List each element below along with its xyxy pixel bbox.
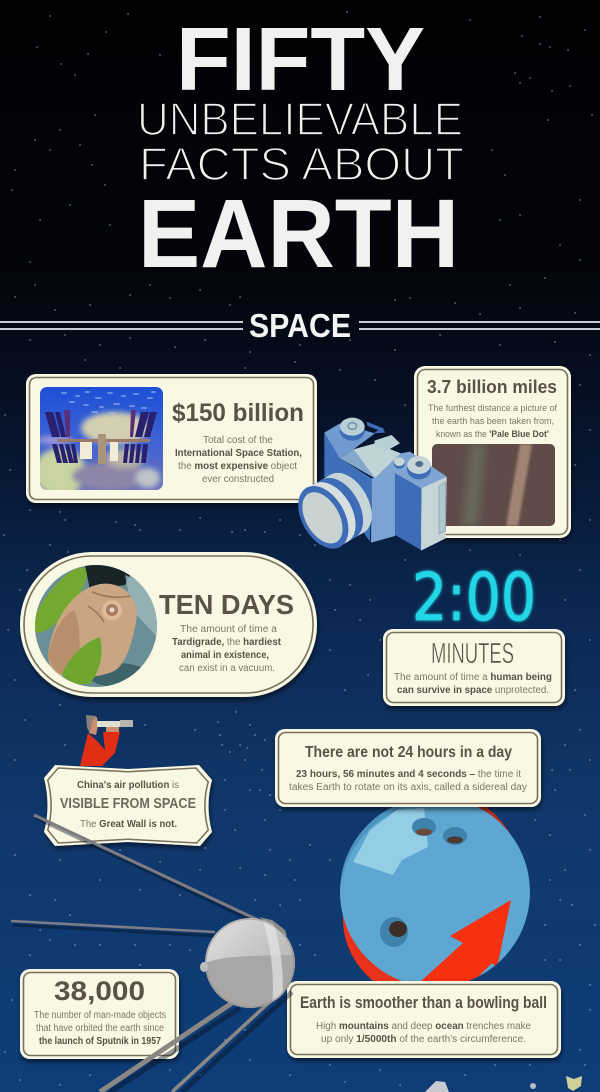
icon: bowling ball with red arrow: [340, 795, 530, 987]
text block: that have orbited the earth since: [36, 1023, 164, 1034]
heading: MINUTES: [431, 638, 514, 670]
title line: FIFTY: FIFTY: [176, 10, 425, 110]
image: International Space Station: [34, 387, 163, 496]
text block: The Great Wall is not.: [80, 819, 177, 830]
text block: [175, 435, 302, 485]
panel: ten days: [20, 552, 317, 697]
heading: TEN DAYS: [159, 589, 294, 620]
title line: EARTH: EARTH: [138, 179, 459, 288]
text block: [289, 769, 527, 793]
text block: High mountains and deep ocean trenches make: [316, 1021, 531, 1032]
title line: UNBELIEVABLE: UNBELIEVABLE: [137, 93, 463, 145]
heading: Earth is smoother than a bowling ball: [300, 994, 547, 1012]
text block: International Space Station,: [175, 448, 302, 459]
text block: ever constructed: [202, 474, 274, 485]
heading: $150 billion: [172, 399, 304, 427]
text block: China's air pollution is: [77, 780, 179, 791]
text block: The furthest distance a picture of: [428, 403, 557, 414]
text block: VISIBLE FROM SPACE: [60, 796, 196, 812]
icon: sputnik satellite: [11, 815, 295, 1092]
panel: smoother than a bowling ball: [287, 981, 561, 1058]
panel: not 24 hours in a day: [275, 729, 541, 807]
text block: [316, 1021, 531, 1045]
text block: the earth has been taken from,: [432, 416, 554, 427]
panel: 38,000: [20, 969, 179, 1059]
heading: There are not 24 hours in a day: [305, 744, 512, 761]
text block: [34, 1010, 166, 1047]
text block: 23 hours, 56 minutes and 4 seconds – the time it: [296, 769, 521, 780]
text block: can survive in space unprotected.: [397, 685, 549, 696]
text block: known as the 'Pale Blue Dot': [436, 429, 549, 440]
panel: visible from space: [44, 765, 212, 846]
text block: The amount of time a: [180, 624, 277, 635]
icon: camera: [288, 418, 447, 557]
digital clock: 2:00: 2:00: [412, 559, 536, 636]
text block: up only 1/5000th of the earth's circumference.: [321, 1034, 526, 1045]
image: pale blue dot: [432, 444, 555, 526]
text block: [428, 403, 557, 440]
heading: 3.7 billion miles: [427, 377, 557, 397]
image: tardigrade: [35, 565, 157, 687]
panel: $150 billion: [26, 374, 317, 503]
text block: Total cost of the: [203, 435, 273, 446]
text block: the most expensive object: [178, 461, 297, 472]
icon: man with binoculars: [80, 715, 133, 766]
section heading: SPACE: SPACE: [249, 307, 351, 344]
title: [137, 10, 464, 288]
heading: 38,000: [54, 976, 145, 1006]
title line: FACTS ABOUT: FACTS ABOUT: [139, 138, 464, 190]
panel: minutes: [383, 629, 565, 706]
panel: 3.7 billion miles: [414, 366, 571, 538]
text block: takes Earth to rotate on its axis, called a sidereal day: [289, 782, 527, 793]
text block: the launch of Sputnik in 1957: [39, 1036, 161, 1047]
text block: [60, 780, 196, 830]
text block: animal in existence,: [181, 650, 269, 661]
text block: The number of man-made objects: [34, 1010, 166, 1021]
icons: space debris at bottom edge: [425, 1076, 582, 1092]
text block: Tardigrade, the hardiest: [172, 637, 282, 648]
text block: can exist in a vacuum.: [179, 663, 275, 674]
text block: [394, 672, 552, 696]
text block: [172, 624, 282, 674]
text block: The amount of time a human being: [394, 672, 552, 683]
